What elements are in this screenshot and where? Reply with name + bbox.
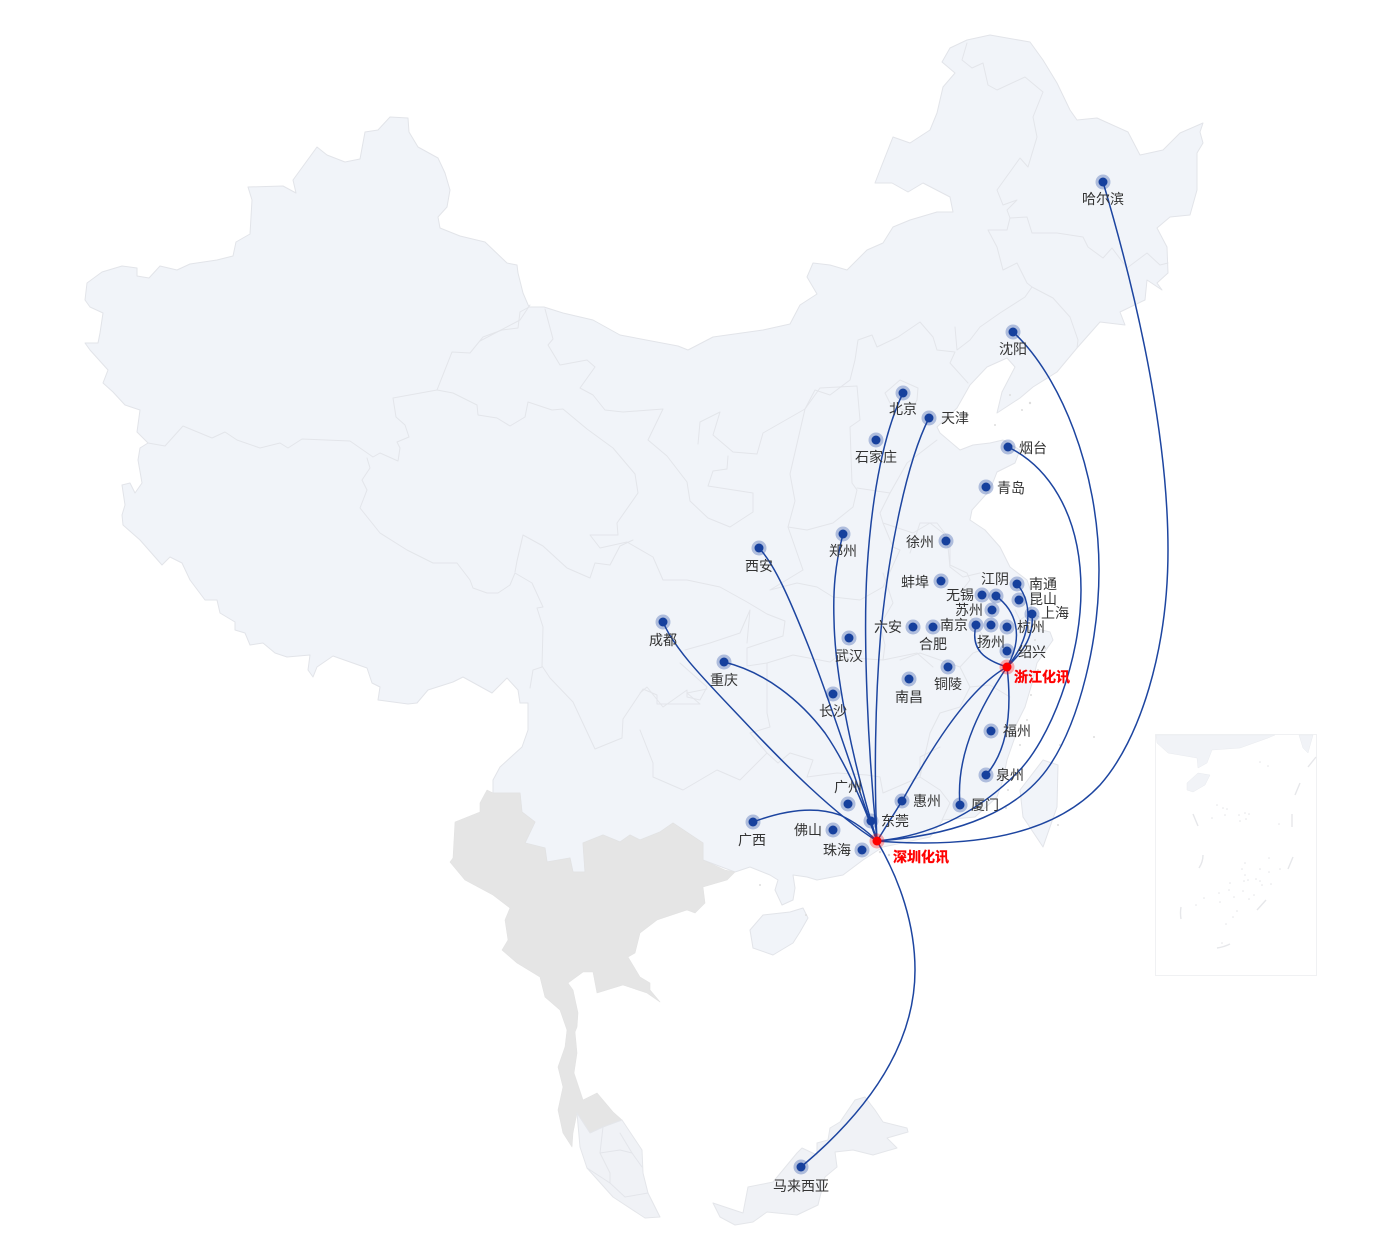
city: 惠州 — [894, 793, 941, 809]
province borders — [148, 43, 1168, 820]
city: 烟台: 烟台 — [1019, 440, 1047, 456]
city: 哈尔滨: 哈尔滨 — [1082, 191, 1124, 207]
city: 徐州 — [906, 534, 954, 550]
arc: Nantong to Zhejiang — [1007, 584, 1028, 667]
city: 郑州: 郑州 — [829, 543, 857, 559]
city: 郑州 — [829, 526, 857, 559]
city: 天津 — [922, 410, 969, 426]
city: 合肥: 合肥 — [919, 636, 947, 652]
city: 广州 — [834, 779, 862, 812]
city: 天津: 天津 — [941, 410, 969, 426]
city: 珠海: 珠海 — [823, 842, 851, 858]
city: 成都: 成都 — [649, 632, 677, 648]
city: 青岛 — [978, 480, 1025, 496]
city: 江阴 — [981, 571, 1009, 604]
city markers and labels — [649, 174, 1124, 1194]
city: 东莞 — [864, 813, 909, 829]
land: Taiwan island — [1020, 760, 1058, 847]
city: 西安 — [745, 540, 773, 574]
city: 南昌: 南昌 — [895, 689, 923, 705]
arc: Shenyang to Shenzhen — [877, 332, 1099, 841]
city: 杭州: 杭州 — [1017, 619, 1045, 635]
city: 重庆 — [710, 654, 738, 688]
city: 扬州 — [977, 618, 1005, 650]
arc: Jiangyin to Zhejiang — [996, 596, 1016, 667]
arc: Quanzhou to Zhejiang — [986, 667, 1009, 775]
city: 珠海 — [823, 842, 870, 858]
city: 北京 — [889, 386, 917, 417]
city: 马来西亚 — [773, 1160, 829, 1194]
city: 西安: 西安 — [745, 558, 773, 574]
city: 佛山: 佛山 — [794, 822, 822, 838]
city: 成都 — [649, 614, 677, 648]
city: 上海: 上海 — [1041, 605, 1069, 621]
city: 重庆: 重庆 — [710, 672, 738, 688]
city: 六安 — [874, 619, 920, 635]
city: 马来西亚: 马来西亚 — [773, 1178, 829, 1194]
city: 石家庄 — [855, 432, 897, 465]
arc: Xi'an to Shenzhen — [759, 548, 877, 841]
city: 福州: 福州 — [1003, 723, 1031, 739]
arc: Guangxi to Shenzhen — [753, 810, 877, 841]
city: 绍兴 — [1000, 644, 1046, 660]
city: 扬州: 扬州 — [977, 634, 1005, 650]
city: 佛山 — [794, 822, 840, 838]
city: 上海 — [1024, 605, 1069, 622]
city: 武汉 — [835, 630, 863, 664]
city: 青岛: 青岛 — [997, 480, 1025, 496]
city: 厦门: 厦门 — [971, 797, 999, 813]
arc: Harbin to Shenzhen — [877, 182, 1168, 843]
city: 昆山 — [1012, 591, 1057, 608]
inset: South China Sea — [1156, 734, 1316, 976]
city: 合肥 — [919, 620, 947, 652]
city: 苏州 — [955, 602, 1000, 618]
city: 沈阳 — [999, 324, 1027, 357]
city: 广西 — [738, 814, 766, 848]
city: 昆山: 昆山 — [1029, 591, 1057, 607]
hub: 浙江化讯 — [1000, 660, 1070, 685]
city: 南昌 — [895, 672, 923, 705]
city: 蚌埠: 蚌埠 — [901, 574, 929, 590]
hub: 深圳化讯: 深圳化讯 — [893, 849, 949, 865]
city: 福州 — [984, 723, 1031, 739]
city: 广西: 广西 — [738, 832, 766, 848]
arc: Huizhou to Shenzhen — [877, 801, 902, 841]
city: 南京 — [940, 617, 984, 633]
land: Hainan island — [750, 908, 808, 955]
land: Indochina (grey neighbouring countries) — [450, 790, 735, 1147]
city: 六安: 六安 — [874, 619, 902, 635]
arc: Chongqing to Shenzhen — [724, 662, 877, 841]
city: 泉州: 泉州 — [996, 767, 1024, 783]
city: 厦门 — [952, 797, 999, 813]
coastal islands — [759, 394, 1095, 916]
city: 无锡 — [946, 587, 990, 603]
flight route arcs — [663, 182, 1168, 1167]
city: 徐州: 徐州 — [906, 534, 934, 550]
city: 哈尔滨 — [1082, 174, 1124, 207]
city: 南京: 南京 — [940, 617, 968, 633]
arc: Zhengzhou to Shenzhen — [834, 534, 877, 841]
city: 铜陵: 铜陵 — [934, 676, 962, 692]
city: 江阴: 江阴 — [981, 571, 1009, 587]
city: 广州: 广州 — [834, 779, 862, 795]
city: 苏州: 苏州 — [955, 602, 983, 618]
land: East Malaysia (Borneo) — [713, 1097, 908, 1225]
city: 绍兴: 绍兴 — [1018, 644, 1046, 660]
arc: Nanjing to Zhejiang — [975, 625, 1007, 667]
land: China mainland — [85, 35, 1203, 905]
arc: Shanghai to Zhejiang — [1007, 614, 1032, 667]
city: 东莞: 东莞 — [881, 813, 909, 829]
land: Peninsular Malaysia — [577, 1113, 660, 1218]
city: 泉州 — [978, 767, 1024, 783]
city: 南通: 南通 — [1029, 576, 1057, 592]
city: 北京: 北京 — [889, 401, 917, 417]
city: 铜陵 — [934, 660, 962, 692]
city: 烟台 — [1000, 440, 1047, 456]
city: 杭州 — [1000, 619, 1045, 635]
city: 长沙 — [819, 686, 847, 719]
city: 沈阳: 沈阳 — [999, 341, 1027, 357]
arc: Huizhou to Zhejiang — [902, 667, 1007, 801]
hub: 浙江化讯: 浙江化讯 — [1014, 669, 1070, 685]
city: 惠州: 惠州 — [913, 793, 941, 809]
arc: Xiamen to Zhejiang — [959, 667, 1007, 805]
city: 长沙: 长沙 — [819, 703, 847, 719]
hub: 深圳化讯 — [870, 834, 949, 865]
city: 石家庄: 石家庄 — [855, 449, 897, 465]
arc: Chengdu to Shenzhen — [663, 622, 877, 841]
arc: Malaysia to Shenzhen — [801, 841, 915, 1167]
city: 南通 — [1010, 576, 1057, 592]
arc: Tianjin to Shenzhen — [875, 418, 929, 841]
city: 武汉: 武汉 — [835, 648, 863, 664]
arc: Yantai to Shenzhen — [877, 447, 1081, 841]
city: 无锡: 无锡 — [946, 587, 974, 603]
city: 蚌埠 — [901, 574, 948, 590]
arc: Beijing to Shenzhen — [866, 393, 903, 841]
